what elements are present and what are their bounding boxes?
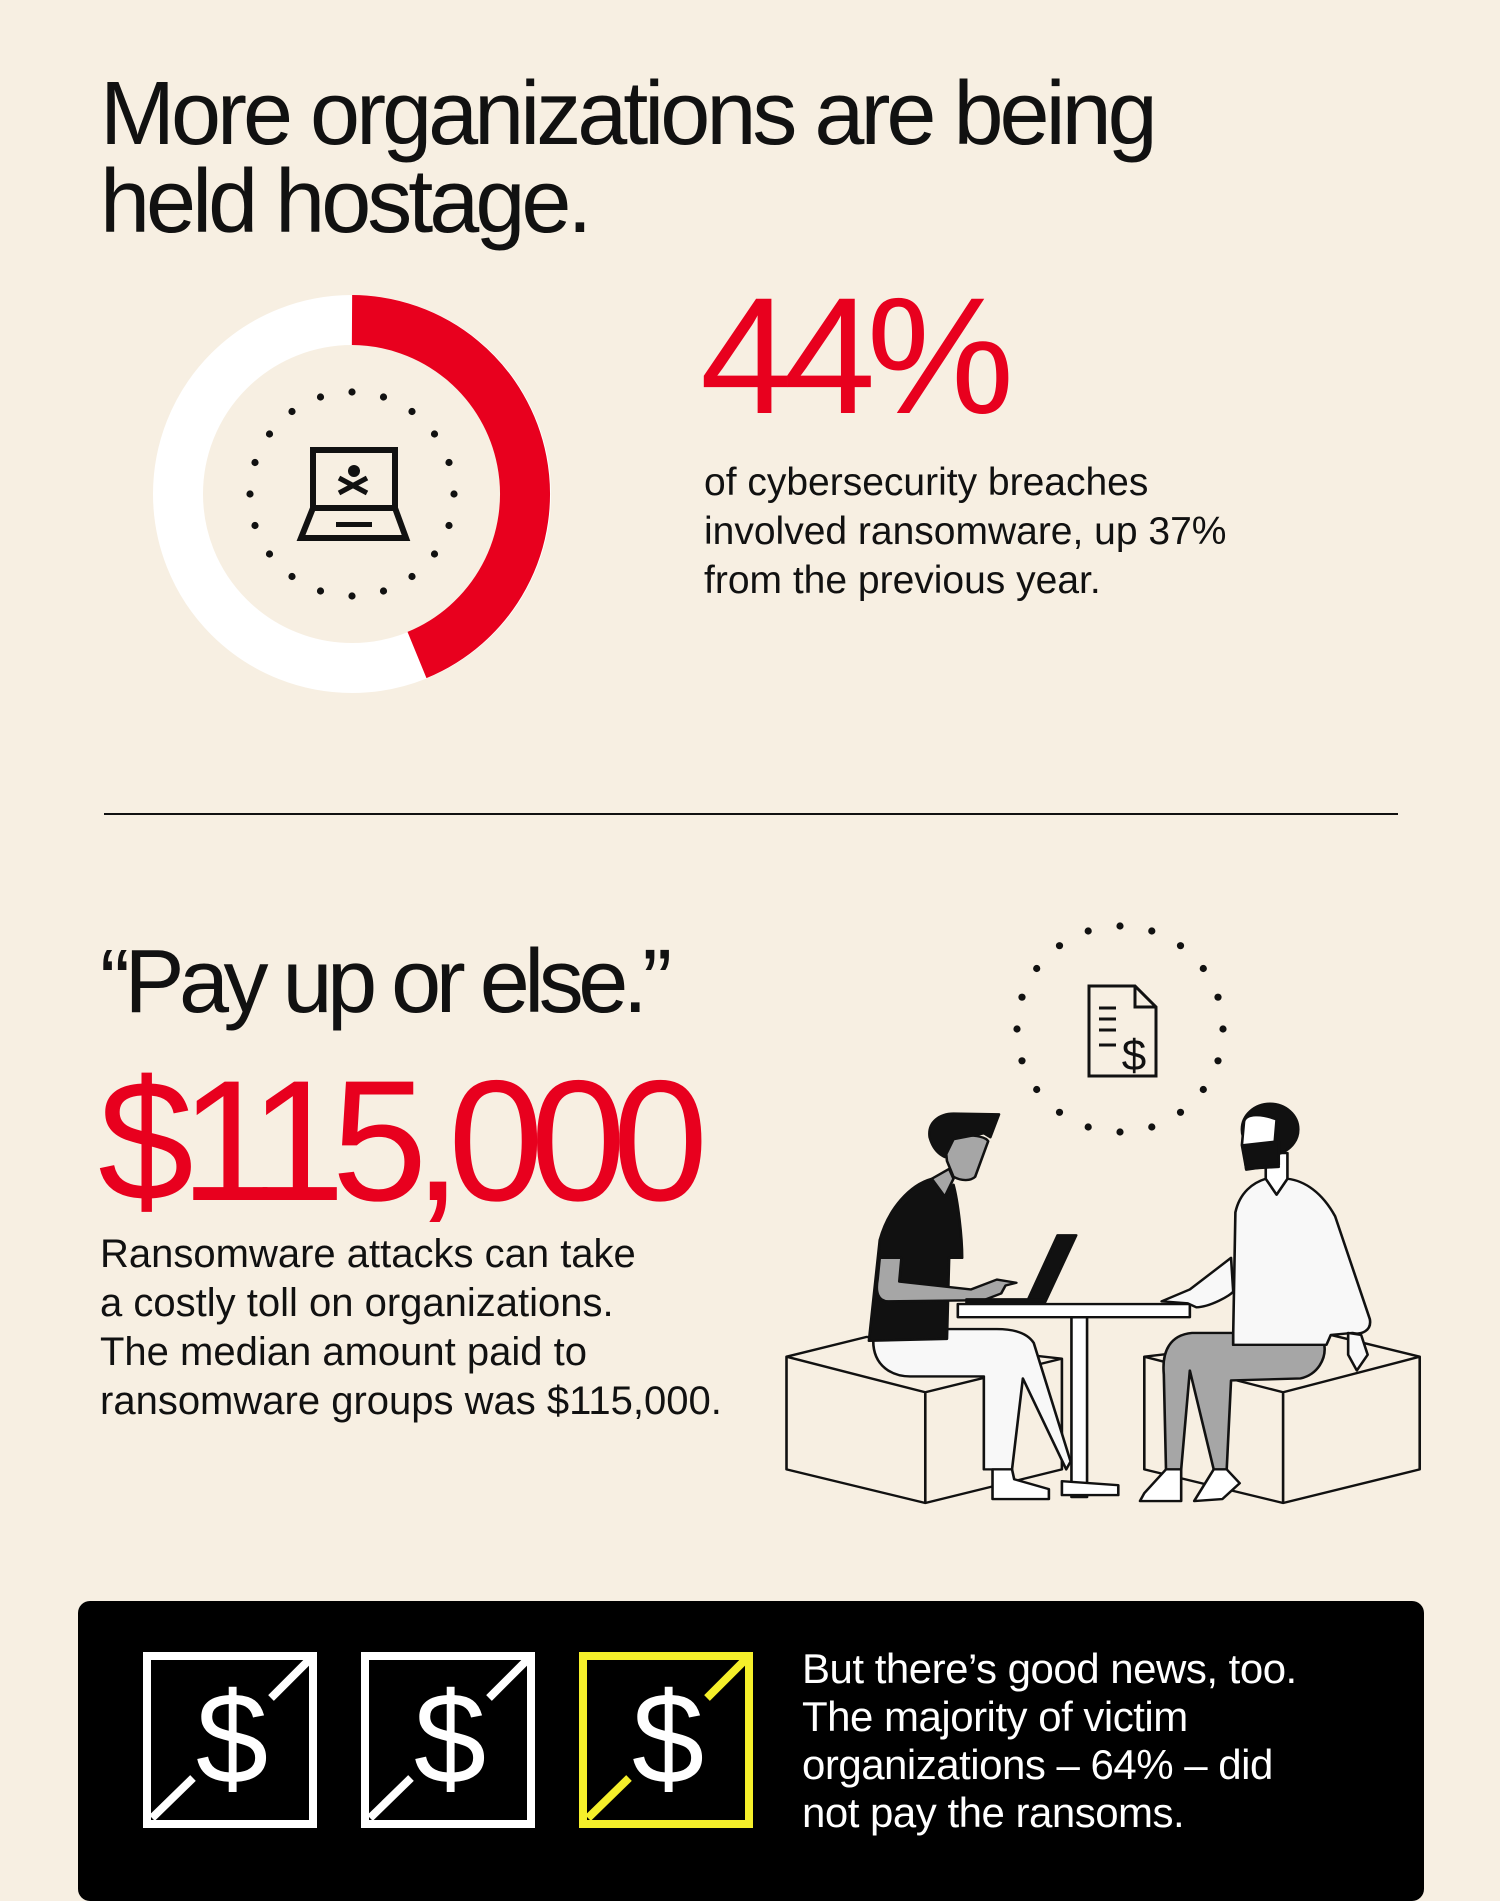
icons: dollar boxes: $	[632, 1665, 704, 1811]
text: breaches: from the previous year.	[704, 559, 1101, 602]
text: good news: not pay the ransoms.	[802, 1789, 1184, 1836]
text: good news	[802, 1645, 1297, 1836]
stat: 44%: 44%	[700, 264, 1005, 449]
text: median amount: ransomware groups was $115,000.	[100, 1379, 722, 1423]
text: breaches: of cybersecurity breaches	[704, 461, 1148, 504]
icon: dotted circle with invoice: $	[1122, 1031, 1146, 1080]
text: good news: The majority of victim	[802, 1693, 1188, 1740]
text: good news: But there’s good news, too.	[802, 1645, 1297, 1692]
icons: dollar boxes: $	[414, 1665, 486, 1811]
text: good news: organizations – 64% – did	[802, 1741, 1273, 1788]
stat: $115,000: $115,000	[98, 1045, 695, 1237]
text: breaches: involved ransomware, up 37%	[704, 510, 1226, 553]
text: median amount: a costly toll on organizations.	[100, 1281, 614, 1325]
panel: good news	[78, 1601, 1424, 1901]
text: median amount	[100, 1232, 722, 1423]
icon: laptop with skull	[246, 388, 458, 600]
illustration: negotiation	[785, 922, 1421, 1504]
heading: pay up: “Pay up or else.”	[100, 932, 667, 1032]
title: held hostage.	[100, 152, 588, 252]
icons: dollar boxes: $	[196, 1665, 268, 1811]
donut chart	[153, 295, 551, 693]
title: More organizations are being	[100, 64, 1154, 164]
title	[100, 64, 1154, 252]
icons: dollar boxes	[143, 1652, 753, 1828]
text: median amount: Ransomware attacks can take	[100, 1232, 636, 1276]
icon: dotted circle with invoice	[1013, 922, 1227, 1136]
text: breaches	[704, 461, 1226, 602]
text: median amount: The median amount paid to	[100, 1330, 587, 1374]
